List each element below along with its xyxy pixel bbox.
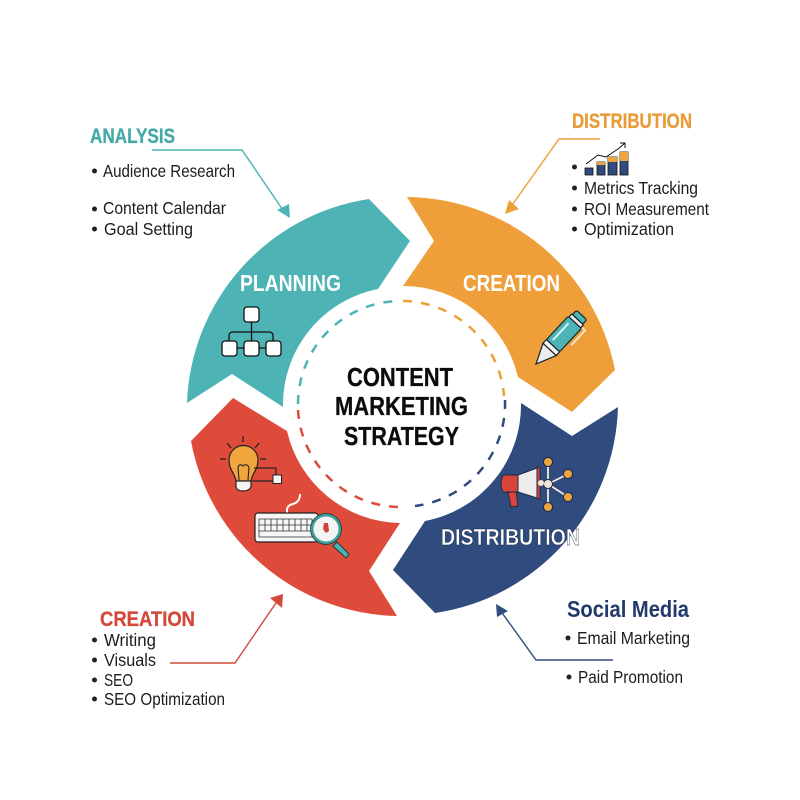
dashed centre ring: [298, 301, 505, 507]
callout: social media: Social Media: [567, 596, 689, 622]
callout: analysis: Audience Research: [103, 161, 235, 181]
arrow: creation list to segment: [170, 594, 283, 663]
arrow: analysis to planning: [152, 150, 290, 218]
panel: creation segment: [403, 197, 615, 412]
icon: growth chart: [585, 143, 628, 175]
callout: analysis: Goal Setting: [104, 219, 193, 239]
callout: social media: [566, 596, 690, 687]
callout: analysis: [90, 125, 235, 239]
heading: creation: CREATION: [463, 270, 560, 296]
icon: keyboard and magnifier: [255, 494, 349, 558]
callout: distribution metrics: [572, 110, 709, 239]
callout: analysis: Content Calendar: [103, 198, 226, 218]
title: CONTENT: [347, 362, 453, 392]
callout: social media: Email Marketing: [577, 628, 690, 648]
title: STRATEGY: [344, 421, 459, 451]
callout: distribution metrics: Metrics Tracking: [584, 178, 698, 198]
callout: creation list: CREATION: [100, 608, 195, 631]
title: MARKETING: [335, 391, 468, 421]
panel: creation/analysis red segment: [191, 398, 400, 616]
callout: creation list: SEO Optimization: [104, 689, 225, 709]
callout: social media: Paid Promotion: [578, 667, 683, 687]
icon: light bulb: [220, 436, 282, 491]
arrow: metrics to creation: [505, 139, 600, 214]
heading: planning: PLANNING: [240, 270, 341, 296]
callout: creation list: Writing: [104, 630, 156, 650]
icon: megaphone and network: [501, 458, 572, 512]
callout: distribution metrics: ROI Measurement: [584, 199, 709, 219]
callout: creation list: SEO: [104, 670, 133, 690]
callout: analysis: ANALYSIS: [90, 125, 175, 148]
callout: distribution metrics: DISTRIBUTION: [572, 110, 692, 133]
arrow: social media to distribution: [496, 604, 613, 660]
callout: creation list: [92, 608, 225, 709]
panel: planning segment: [187, 199, 410, 407]
callout: distribution metrics: Optimization: [584, 219, 674, 239]
panel: distribution segment: [393, 403, 618, 613]
callout: creation list: Visuals: [104, 650, 156, 670]
heading: distribution: DISTRIBUTION: [441, 524, 580, 550]
icon: org chart: [222, 307, 281, 356]
title: [335, 362, 468, 451]
icon: pen: [529, 309, 591, 373]
